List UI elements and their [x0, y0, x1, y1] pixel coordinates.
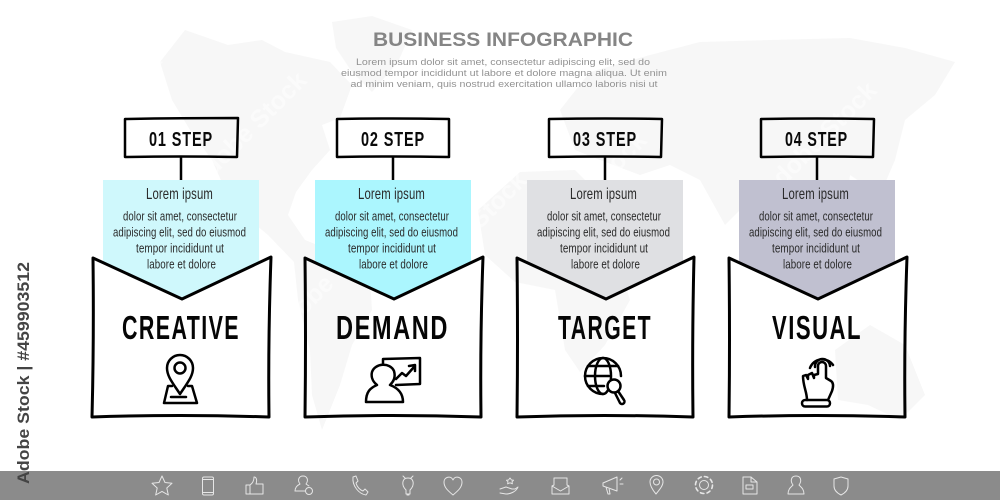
step label box 1 [125, 118, 238, 157]
tab text 4: adipiscing elit, sed do eiusmod [749, 224, 882, 240]
icon: telephone [353, 476, 368, 495]
tab text 2: labore et dolore [359, 256, 428, 272]
title: BUSINESS INFOGRAPHIC [373, 30, 633, 51]
intro text: ad minim veniam, quis nostrud exercitation ullamco laboris nisi ut [350, 79, 658, 90]
envelope frame 1 [92, 257, 271, 417]
stock id label: Adobe Stock | #459903512 [14, 262, 33, 484]
icon: heart [444, 477, 462, 495]
icon: gear [696, 476, 712, 494]
icon: user check [295, 476, 312, 494]
tab text 2: tempor incididunt ut [348, 240, 436, 256]
tab text 4: Lorem ipsum [782, 186, 849, 203]
heading: demand: DEMAND [336, 309, 449, 346]
icon: shield [834, 477, 848, 495]
intro text [341, 57, 667, 90]
tab text 4: dolor sit amet, consectetur [759, 208, 873, 224]
colour tab 2 [315, 180, 471, 299]
icon: star [152, 476, 172, 495]
watermark pattern: Adobe Stock [184, 66, 312, 194]
step label box 4 [761, 118, 874, 157]
icon: map pin [164, 355, 197, 403]
heading: creative: CREATIVE [122, 309, 240, 346]
icon: location pin [650, 476, 663, 494]
colour tab 4 [739, 180, 895, 299]
icon: pointing hand [802, 359, 833, 406]
intro text: eiusmod tempor incididunt ut labore et dolore magna aliqua. Ut enim [341, 68, 667, 79]
watermark pattern: Adobe Stock [404, 346, 532, 474]
tab text 4 [749, 186, 882, 272]
connector 3 [604, 157, 606, 180]
background world map [160, 16, 955, 430]
tab text 3: tempor incididunt ut [560, 240, 648, 256]
tab text 1: adipiscing elit, sed do eiusmod [113, 224, 246, 240]
tab text 1: tempor incididunt ut [136, 240, 224, 256]
tab text 3: Lorem ipsum [570, 186, 637, 203]
watermark pattern: Adobe Stock [674, 206, 802, 334]
step label box 3 [549, 118, 662, 157]
icon: mobile phone [202, 477, 214, 495]
watermark pattern: Adobe Stock [754, 76, 882, 204]
step label box 3: 03 STEP [573, 129, 637, 151]
icon: light bulb [403, 476, 413, 495]
panel: step 3 target [517, 118, 694, 417]
panel: step 1 creative [92, 118, 271, 417]
heading: target: TARGET [558, 309, 652, 346]
footer icon bar [0, 471, 1000, 500]
tab text 3: labore et dolore [571, 256, 640, 272]
tab text 2: dolor sit amet, consectetur [335, 208, 449, 224]
watermark pattern: Adobe Stock [694, 326, 822, 454]
intro text: Lorem ipsum dolor sit amet, consectetur adipiscing elit, sed do [356, 57, 650, 68]
tab text 1: Lorem ipsum [146, 186, 213, 203]
watermark pattern: Adobe Stock [39, 46, 167, 174]
icon: thumbs up [246, 477, 263, 494]
tab text 1: dolor sit amet, consectetur [123, 208, 237, 224]
icon: hand with star [500, 478, 518, 494]
envelope frame 4 [729, 257, 907, 417]
icon: open mail [552, 478, 569, 494]
tab text 1: labore et dolore [147, 256, 216, 272]
step label box 2: 02 STEP [361, 129, 425, 151]
tab text 4: labore et dolore [783, 256, 852, 272]
tab text 3: adipiscing elit, sed do eiusmod [537, 224, 670, 240]
panel: step 4 visual [729, 118, 907, 417]
panel: step 2 demand [305, 118, 483, 417]
tab text 3 [537, 186, 670, 272]
tab text 2 [325, 186, 458, 272]
tab text 1 [113, 186, 246, 272]
watermark pattern: Adobe Stock [404, 166, 532, 294]
tab text 2: Lorem ipsum [358, 186, 425, 203]
step label box 4: 04 STEP [785, 129, 848, 151]
step label box 1: 01 STEP [149, 129, 213, 151]
tab text 2: adipiscing elit, sed do eiusmod [325, 224, 458, 240]
watermark pattern: Adobe Stock [264, 216, 392, 344]
icon: globe with magnifier [585, 358, 624, 404]
connector 1 [180, 157, 182, 180]
icon: person [788, 476, 804, 494]
connector 2 [392, 157, 394, 180]
tab text 4: tempor incididunt ut [772, 240, 860, 256]
heading: visual: VISUAL [772, 309, 862, 346]
tab text 3: dolor sit amet, consectetur [547, 208, 661, 224]
icon: megaphone [603, 477, 623, 494]
colour tab 1 [103, 180, 259, 299]
envelope frame 3 [517, 257, 694, 417]
icon: presenter with chart [366, 358, 420, 402]
connector 4 [816, 157, 818, 180]
watermark pattern: Adobe Stock [524, 126, 652, 254]
envelope frame 2 [305, 257, 483, 417]
step label box 2 [337, 118, 449, 157]
colour tab 3 [527, 180, 683, 299]
icon: document [743, 477, 757, 494]
